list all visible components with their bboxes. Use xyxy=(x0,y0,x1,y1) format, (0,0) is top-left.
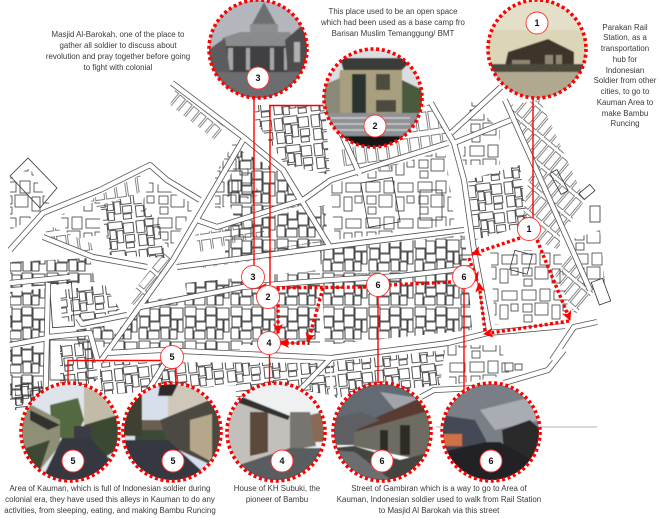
text: Masjid Al-Barokah: gather all soldier to discuss about xyxy=(59,41,177,50)
map marker 4 xyxy=(258,332,280,354)
map marker 2 xyxy=(256,286,280,308)
text: Parakan Rail Station: Indonesian xyxy=(606,66,644,75)
photo 6: Gambiran street, view two: 6 xyxy=(488,456,494,466)
map marker 1: 1 xyxy=(526,224,532,234)
map marker 3 xyxy=(242,266,264,288)
text: Area of Kauman: colonial era, they have used this alleys in Kauman to do any xyxy=(5,495,215,504)
text: Area of Kauman xyxy=(4,484,216,515)
text: Parakan Rail Station: make Bambu xyxy=(602,109,648,118)
text: Street of Gambiran xyxy=(337,484,541,515)
map: neighbourhood street plan xyxy=(10,83,611,427)
photo 2: former base camp building: 2 xyxy=(372,121,378,131)
individual large buildings xyxy=(10,158,611,380)
map marker 5 xyxy=(160,346,184,368)
photo 3: Masjid Al-Barokah xyxy=(208,0,308,100)
text: Parakan Rail Station: cities, to go to xyxy=(601,87,650,96)
text: base camp: This place used to be an open space xyxy=(329,7,458,16)
photo 6: Gambiran street, view two xyxy=(441,383,541,483)
text: Parakan Rail Station: transportation xyxy=(601,44,649,53)
map marker 6 east xyxy=(452,266,476,288)
photo 2: former base camp building xyxy=(323,48,423,148)
map marker 1 xyxy=(518,218,540,240)
text: House of KH Subuki: pioneer of Bambu xyxy=(246,495,308,504)
text: Parakan Rail Station: Kauman Area to xyxy=(597,98,654,107)
map marker 6 west xyxy=(366,274,390,296)
text: base camp: Barisan Muslim Temanggung/ BMT xyxy=(332,29,454,38)
text: Parakan Rail Station: Soldier from other xyxy=(594,76,657,85)
map marker 5: 5 xyxy=(169,352,175,362)
text: Parakan Rail Station xyxy=(594,23,657,128)
building blocks xyxy=(10,90,605,410)
text: Parakan Rail Station: hub for xyxy=(613,55,638,64)
photo 5: Kauman alley, view two xyxy=(122,383,222,483)
text: House of KH Subuki: House of KH Subuki, the xyxy=(234,484,321,493)
map marker 2: 2 xyxy=(265,292,271,302)
street network xyxy=(10,83,597,420)
photo 4: House of KH Subuki xyxy=(226,383,326,483)
text: Street of Gambiran: Kauman, Indonesian soldier used to walk from Rail Station xyxy=(337,495,541,504)
text: base camp: which had been used as a base camp fro xyxy=(320,18,466,27)
photo 4: House of KH Subuki: 4 xyxy=(279,456,285,466)
text: Area of Kauman: activities, from sleeping, eating, and making Bambu Runcing xyxy=(4,506,216,515)
map marker 6 east: 6 xyxy=(461,272,467,282)
map marker 3: 3 xyxy=(250,272,256,282)
connector lines from photos to map markers xyxy=(68,95,533,392)
photo 5: Kauman alley, view two: 5 xyxy=(170,456,176,466)
text: Parakan Rail Station: Runcing xyxy=(611,119,639,128)
photo 5: Kauman alley, view one: 5 xyxy=(70,456,76,466)
text: Masjid Al-Barokah: revolution and pray together before going xyxy=(46,52,190,61)
text: Masjid Al-Barokah: to fight with colonial xyxy=(84,63,153,72)
photo 1: Parakan Rail Station xyxy=(487,0,590,100)
photo 3: Masjid Al-Barokah: 3 xyxy=(255,73,261,83)
text: Masjid Al-Barokah xyxy=(46,30,190,72)
text: Parakan Rail Station: Station, as a xyxy=(603,33,648,42)
text: Masjid Al-Barokah: Masjid Al-Barokah, one of the place to xyxy=(52,30,185,39)
photo 1: Parakan Rail Station: 1 xyxy=(534,18,540,28)
walking route: dotted red arrows xyxy=(258,238,570,343)
text: Area of Kauman: Area of Kauman, which is full of Indonesian soldier during xyxy=(10,484,210,493)
text: base camp xyxy=(320,7,466,38)
text: House of KH Subuki xyxy=(234,484,321,504)
map edge line xyxy=(436,426,597,428)
photo 6: Gambiran street, view one: 6 xyxy=(379,456,385,466)
photo 6: Gambiran street, view one xyxy=(332,383,432,483)
text: Parakan Rail Station: Parakan Rail xyxy=(602,23,648,32)
map marker 4: 4 xyxy=(266,338,272,348)
map marker 6 west: 6 xyxy=(375,280,381,290)
text: Street of Gambiran: to Masjid Al Barokah via this street xyxy=(379,506,500,515)
photo 5: Kauman alley, view one xyxy=(20,383,120,483)
text: Street of Gambiran: Street of Gambiran which is a way to go to Area of xyxy=(351,484,528,493)
